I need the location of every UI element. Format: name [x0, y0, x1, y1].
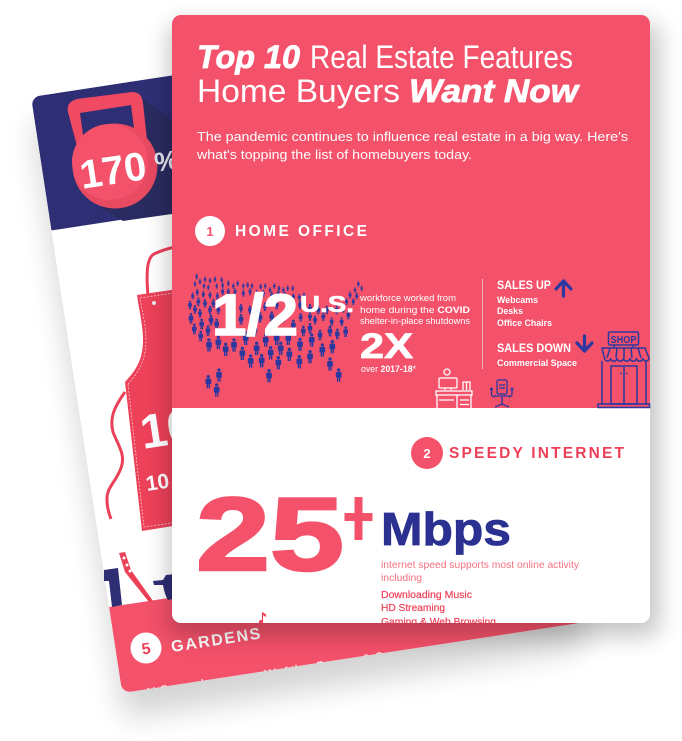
- sales up: SALES UP: [497, 280, 551, 292]
- internet description: [381, 559, 580, 584]
- sheet background: [31, 26, 585, 693]
- icon: shop: [598, 332, 650, 408]
- number badge: [411, 437, 443, 469]
- activities list: [258, 590, 496, 623]
- section 1 heading: [195, 216, 367, 246]
- over 2017-18: over 2017-18*: [361, 364, 416, 375]
- kettlebell long shadow: [100, 93, 172, 221]
- sales up: Webcams: [497, 295, 538, 306]
- stat: 1/2 U.S.: 1/2: [212, 283, 298, 348]
- kettlebell value: 170: [77, 144, 149, 198]
- section 2 heading: 2: [423, 446, 431, 461]
- icon: desk with computer: [436, 369, 472, 408]
- percent sign: %: [152, 145, 181, 178]
- title: Want Now: [409, 73, 580, 109]
- icon: office chair: [491, 380, 513, 407]
- workforce text: workforce worked from: [359, 293, 456, 304]
- sales down: [497, 343, 577, 369]
- number badge: [130, 632, 162, 664]
- title: Top 10: [197, 39, 300, 75]
- stat: 25+: 25: [196, 477, 344, 593]
- icon: apron: [107, 247, 260, 531]
- workforce text: home during the COVID: [360, 305, 470, 316]
- sales up: Desks: [497, 306, 523, 317]
- speedy internet label: SPEEDY INTERNET: [449, 445, 625, 462]
- home office label: HOME OFFICE: [235, 223, 367, 240]
- internet description: internet speed supports most online activity: [381, 559, 580, 571]
- icon: music note: [259, 612, 266, 624]
- apron small number: 10: [144, 470, 171, 496]
- sales up: Office Chairs: [497, 318, 552, 329]
- internet description: including: [381, 572, 422, 584]
- section 1 heading: 1: [206, 224, 214, 239]
- icon: kettlebell: [68, 92, 158, 208]
- number badge: [195, 216, 225, 246]
- gardens body text: U.S. seed company W. Atlee Burpee & Co.: [146, 648, 396, 699]
- section 5 heading: [130, 625, 264, 664]
- sales up: [497, 280, 552, 329]
- divider: [482, 279, 483, 369]
- intro text: what's topping the list of homebuyers today.: [196, 147, 472, 162]
- workforce text: shelter-in-place shutdowns: [360, 316, 470, 327]
- arrow down: [577, 336, 592, 351]
- sales down: SALES DOWN: [497, 343, 571, 355]
- icons: kitchen tools: [104, 552, 185, 607]
- section 2 heading: [411, 437, 625, 469]
- section 5 heading: 5: [141, 640, 152, 659]
- front sheet shadow: [169, 24, 659, 636]
- stat: 2X: 2X: [360, 327, 414, 366]
- stat: 1/2 U.S.: [212, 283, 354, 348]
- activities list: Gaming & Web Browsing: [381, 616, 496, 628]
- red upper section: [172, 15, 650, 408]
- title: Home Buyers: [197, 73, 400, 109]
- shop sign text: SHOP: [610, 335, 637, 346]
- intro text: [196, 129, 629, 162]
- activities list: HD Streaming: [381, 602, 445, 614]
- panel: front sheet: [172, 15, 650, 628]
- apron big number: 10: [137, 399, 197, 460]
- arrow up: [556, 281, 571, 296]
- gardens label: GARDENS: [170, 625, 264, 656]
- intro text: The pandemic continues to influence real estate in a big way. Here's: [197, 129, 629, 144]
- title: Real Estate Features: [310, 39, 573, 75]
- stat: 25+: [196, 477, 372, 593]
- title: [197, 39, 580, 109]
- activities list: Downloading Music: [381, 589, 472, 601]
- white lower section: [172, 15, 650, 623]
- sales down: Commercial Space: [497, 358, 577, 369]
- header band: [31, 26, 585, 693]
- panel: back sheet: [31, 26, 585, 693]
- stat: 1/2 U.S.: U.S.: [300, 291, 354, 317]
- back sheet shadow: [33, 51, 587, 718]
- chart: people map of the U.S.: [188, 274, 363, 397]
- stat: Mbps: Mbps: [381, 503, 511, 555]
- workforce text: [359, 293, 470, 327]
